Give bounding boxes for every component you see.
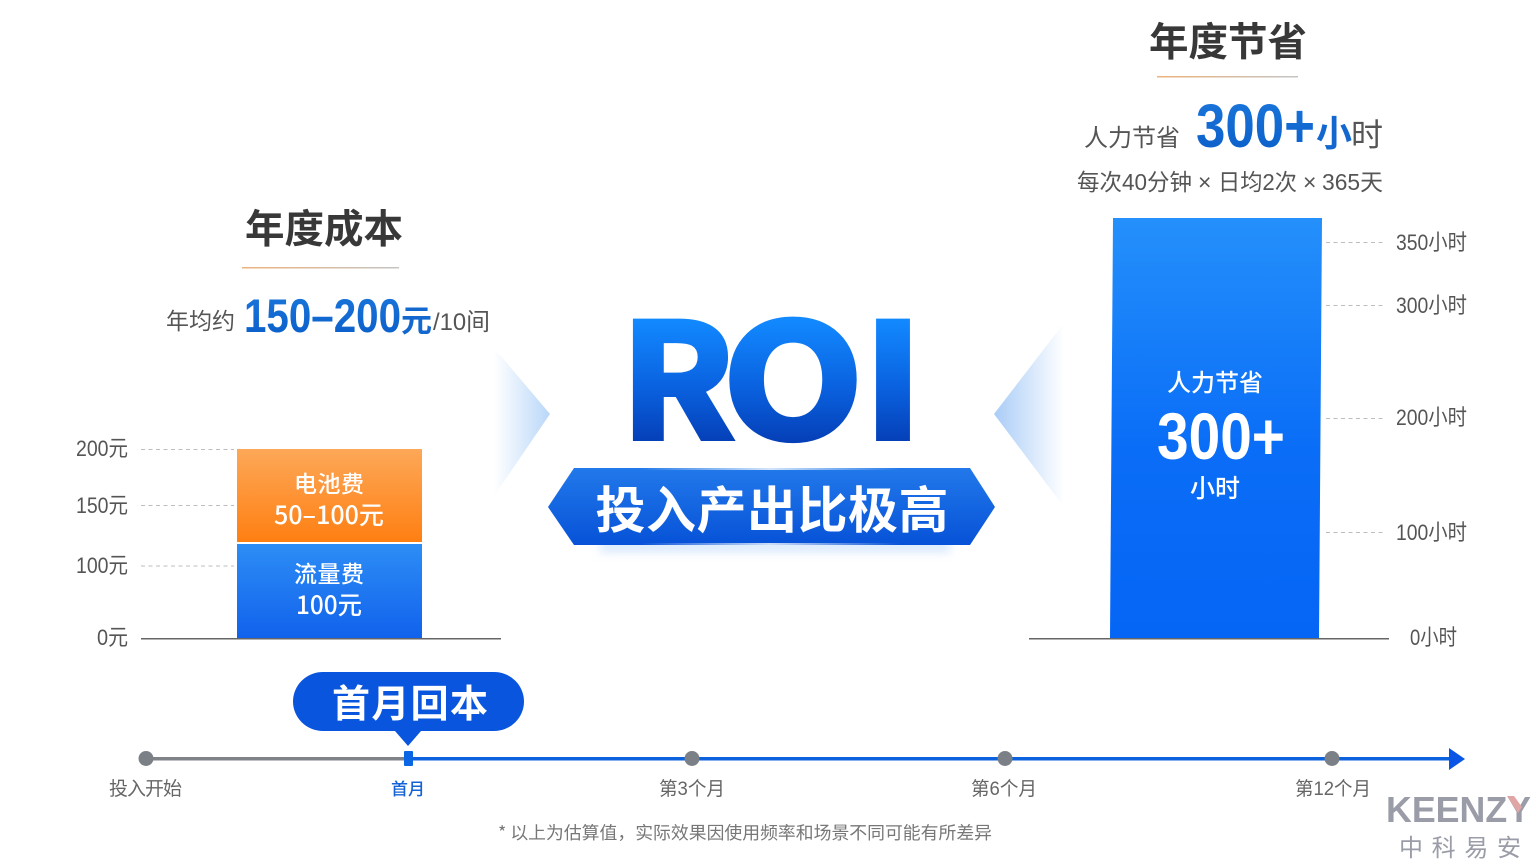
savings bar: [1110, 218, 1322, 638]
cost summary: 年均约: [166, 302, 235, 336]
cost summary: 元: [401, 296, 432, 341]
footnote: * 以上为估算值，实际效果因使用频率和场景不同可能有所差异: [498, 820, 992, 845]
savings axis labels: 300小时: [1396, 293, 1467, 318]
cost axis labels: 100元: [76, 553, 128, 578]
savings bar: 小时: [1190, 469, 1240, 505]
savings axis labels: 0小时: [1410, 625, 1457, 650]
timeline labels: 第6个月: [971, 778, 1037, 800]
savings formula: 365天: [1322, 169, 1383, 195]
ROI block: [548, 257, 995, 552]
cost axis labels: [76, 436, 128, 650]
savings summary: 人力节省: [1084, 118, 1180, 153]
banner: high ROI: [548, 468, 995, 552]
timeline line: before payback: [146, 757, 408, 760]
timeline line: after payback: [408, 757, 1452, 760]
savings formula: [1077, 169, 1383, 195]
stacked bar: data fee: [237, 544, 422, 638]
heading underline: [242, 267, 399, 268]
savings grid lines: [1326, 242, 1385, 532]
cost axis labels: 200元: [76, 436, 128, 461]
stacked bar: battery fee: [237, 449, 422, 542]
stacked bar: battery fee: 50–100元: [274, 496, 384, 532]
savings axis labels: 350小时: [1396, 230, 1467, 255]
savings formula: ×: [1303, 169, 1316, 195]
timeline labels: [109, 774, 1371, 801]
arrow: cost to ROI: [494, 348, 550, 496]
ROI wordmark: R: [621, 257, 734, 484]
savings bar: 300+: [1157, 399, 1285, 473]
arrow: savings to ROI: [994, 323, 1064, 507]
timeline markers: [138, 751, 1340, 766]
timeline labels: 首月: [391, 775, 425, 800]
savings formula: 日均2次: [1218, 169, 1297, 195]
timeline: [109, 748, 1465, 801]
savings formula: 每次40分钟: [1077, 169, 1192, 195]
savings summary: 300+: [1196, 92, 1315, 160]
heading: annual cost: 年度成本: [245, 198, 403, 255]
panel: annual savings: [1029, 11, 1467, 650]
logo: KEENZY: 中科易安: [1399, 828, 1521, 863]
savings summary: 时: [1351, 110, 1383, 156]
panel: annual cost: [76, 198, 501, 650]
callout: payback in first month: [293, 672, 524, 746]
stacked bar: data fee: 流量费: [294, 555, 364, 589]
timeline labels: 第12个月: [1295, 778, 1371, 800]
banner: high ROI: 投入产出比极高: [596, 471, 948, 543]
logo: KEENZY: KEENZY: [1386, 789, 1531, 830]
savings summary: 小: [1316, 105, 1352, 157]
savings axis labels: [1396, 230, 1467, 650]
ROI wordmark: I: [863, 257, 923, 484]
ROI wordmark: [621, 257, 923, 484]
heading underline: [1157, 76, 1298, 78]
logo: KEENZY: [1386, 789, 1531, 863]
cost summary: 150–200: [244, 289, 401, 342]
timeline labels: 第3个月: [659, 778, 725, 800]
savings formula: ×: [1198, 169, 1211, 195]
savings axis labels: 200小时: [1396, 405, 1467, 430]
cost axis labels: 150元: [76, 493, 128, 518]
cost summary: [166, 289, 490, 342]
cost grid lines: [141, 450, 234, 566]
savings summary: [1084, 92, 1383, 160]
heading: annual savings: 年度节省: [1149, 11, 1307, 68]
timeline labels: 投入开始: [109, 774, 182, 801]
callout: payback in first month: 首月回本: [332, 673, 488, 728]
savings bar: 人力节省: [1167, 363, 1263, 398]
savings axis labels: 100小时: [1396, 520, 1467, 545]
ROI wordmark: O: [723, 257, 863, 484]
stacked bar: battery fee: 电池费: [294, 465, 364, 499]
timeline arrowhead: [1449, 748, 1465, 770]
cost axis labels: 0元: [97, 625, 128, 650]
savings baseline: [1029, 638, 1389, 640]
stacked bar: data fee: 100元: [296, 586, 362, 622]
cost summary: /10间: [433, 309, 490, 336]
cost baseline: [141, 638, 501, 640]
